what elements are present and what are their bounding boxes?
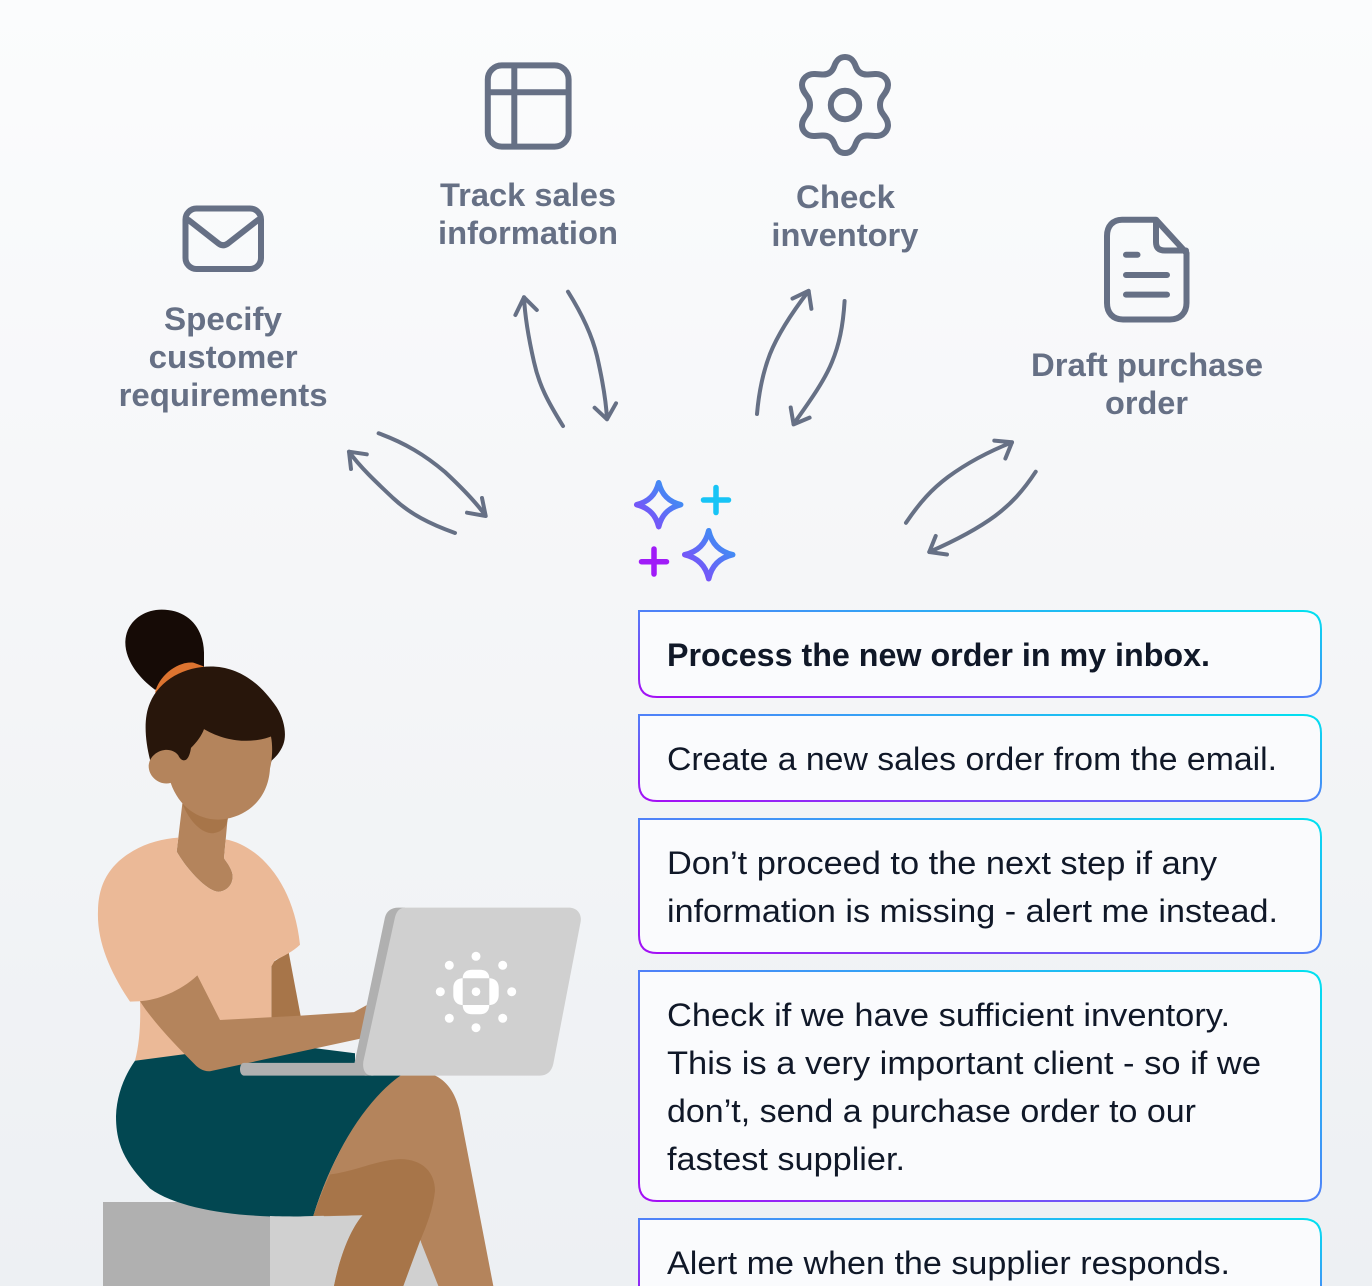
label: check inventory [771, 179, 919, 253]
arrows: inventory to centre [791, 301, 845, 424]
arrows: specify to centre [379, 433, 486, 516]
prompt box 1 [639, 611, 1321, 697]
label: check inventory: Check [796, 179, 895, 215]
prompt box 5: Alert me when the supplier responds. [667, 1245, 1230, 1281]
prompt box 3: information is missing - alert me instead. [667, 893, 1278, 929]
step: track sales information [438, 65, 618, 251]
label: specify customer requirements: customer [149, 339, 298, 375]
label: track sales information: information [438, 215, 618, 251]
label: track sales information [438, 177, 618, 251]
label: specify customer requirements [119, 301, 328, 413]
icon: document [1107, 220, 1186, 320]
arrows: purchase order to centre [929, 472, 1036, 554]
prompt box 5 [639, 1219, 1321, 1286]
laptop [240, 908, 581, 1076]
icon: envelope [186, 208, 261, 269]
arrows: centre to purchase order [906, 441, 1012, 523]
laptop logo [436, 952, 516, 1032]
prompt box 4: This is a very important client - so if we [667, 1045, 1261, 1081]
arrows: track sales to centre [568, 292, 616, 419]
icon: gear [802, 57, 888, 153]
illustration: woman with laptop on a seat [98, 610, 581, 1286]
label: check inventory: inventory [771, 217, 919, 253]
prompt box 1: Process the new order in my inbox. [667, 637, 1210, 673]
arrows: centre to specify [349, 452, 455, 533]
prompt box 4: fastest supplier. [667, 1141, 905, 1177]
prompt box 3: Don’t proceed to the next step if any [667, 845, 1217, 881]
prompt box 3 [639, 819, 1321, 953]
label: track sales information: Track sales [440, 177, 616, 213]
prompt box 4: Check if we have sufficient inventory. [667, 997, 1230, 1033]
step: draft purchase order [1031, 220, 1263, 421]
step: check inventory [771, 57, 919, 253]
icon: sparkles [637, 483, 733, 579]
prompt box 2: Create a new sales order from the email. [667, 741, 1277, 777]
prompt box 4 [639, 971, 1321, 1201]
label: specify customer requirements: Specify [164, 301, 282, 337]
prompt box 2 [639, 715, 1321, 801]
label: draft purchase order [1031, 347, 1263, 421]
seat [103, 1202, 440, 1286]
prompt box 4: don’t, send a purchase order to our [667, 1093, 1196, 1129]
arrows: centre to track sales [515, 297, 563, 426]
figure [98, 610, 493, 1286]
label: specify customer requirements: requirements [119, 377, 328, 413]
icon: table [488, 65, 569, 147]
arrows: centre to inventory [757, 291, 811, 414]
step: specify customer requirements [119, 208, 328, 413]
label: draft purchase order: order [1105, 385, 1188, 421]
label: draft purchase order: Draft purchase [1031, 347, 1263, 383]
